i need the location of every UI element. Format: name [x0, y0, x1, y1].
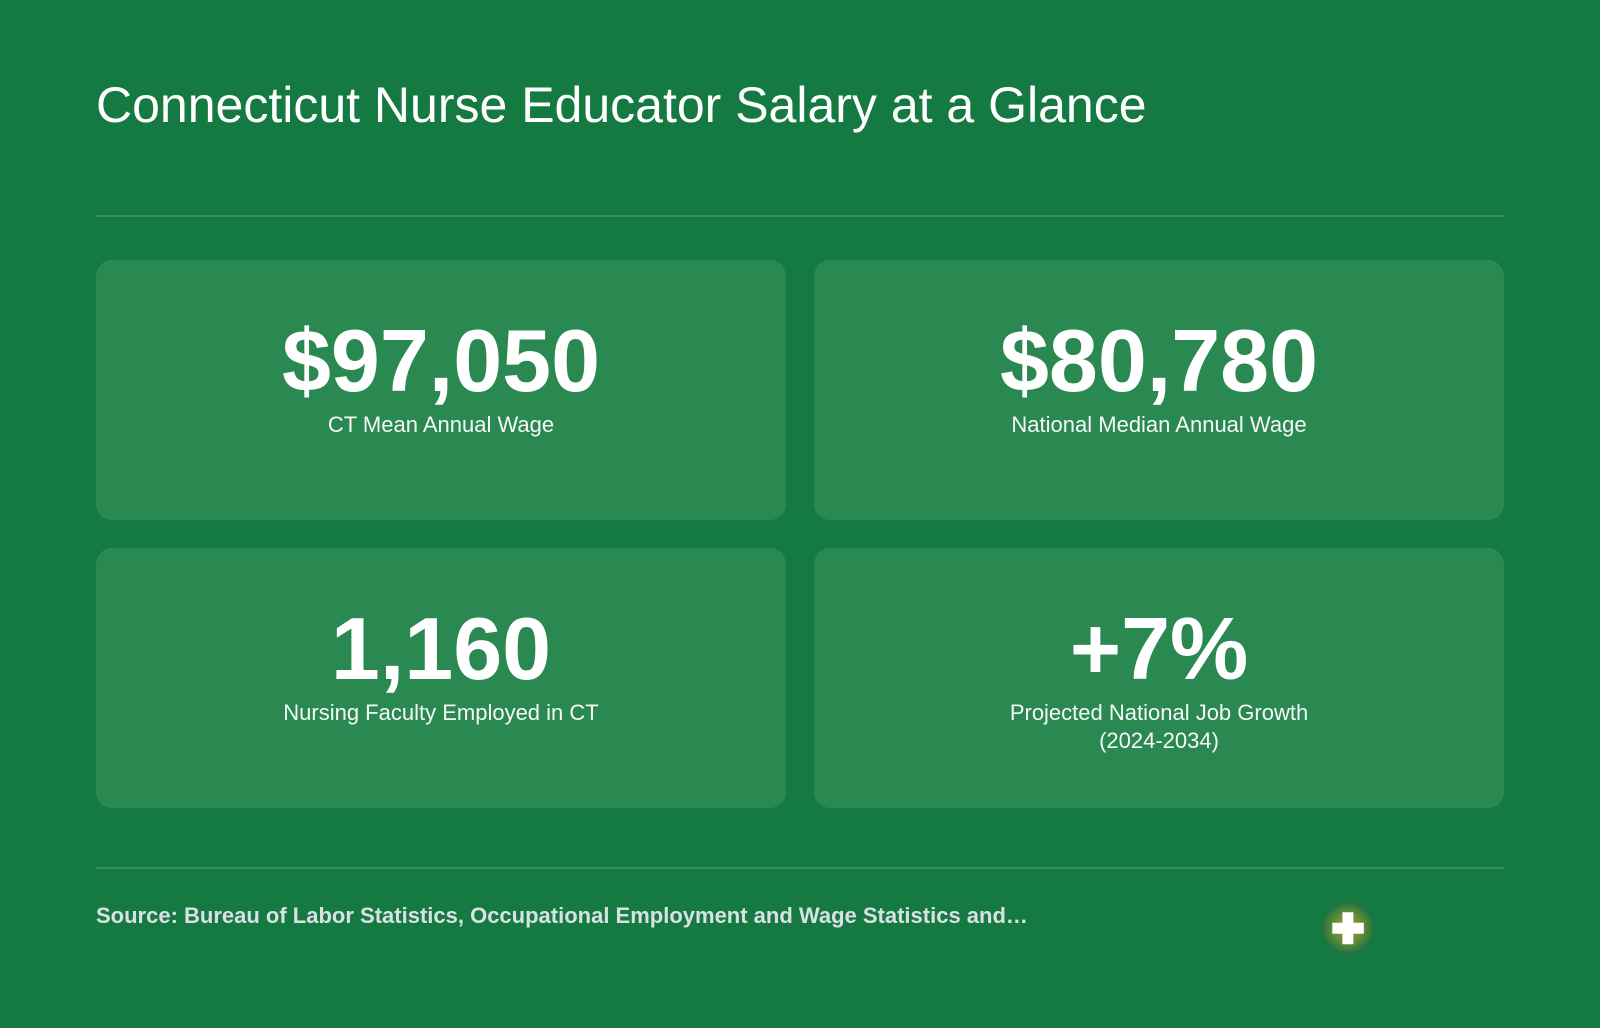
source text: Source: Bureau of Labor Statistics, Occupational Employment and Wage Statistics and…: [96, 903, 1028, 928]
stat value: 1,160: [331, 599, 551, 698]
panel: CT mean annual wage: [96, 260, 786, 520]
panel: nursing faculty employed: [96, 548, 786, 808]
icon: medical cross: [1322, 902, 1374, 954]
stat label: National Median Annual Wage: [1011, 412, 1307, 437]
stat label: (2024-2034): [1099, 728, 1219, 753]
title: Connecticut Nurse Educator Salary at a Glance: [96, 77, 1147, 133]
panel: projected job growth: [814, 548, 1504, 808]
stat label: Nursing Faculty Employed in CT: [283, 700, 599, 725]
stat label: CT Mean Annual Wage: [328, 412, 554, 437]
stat value: $97,050: [282, 311, 600, 410]
stat value: +7%: [1070, 599, 1248, 698]
stat label: Projected National Job Growth: [1010, 700, 1308, 725]
stat label: [1010, 700, 1308, 753]
panel: national median annual wage: [814, 260, 1504, 520]
stat value: $80,780: [1000, 311, 1318, 410]
